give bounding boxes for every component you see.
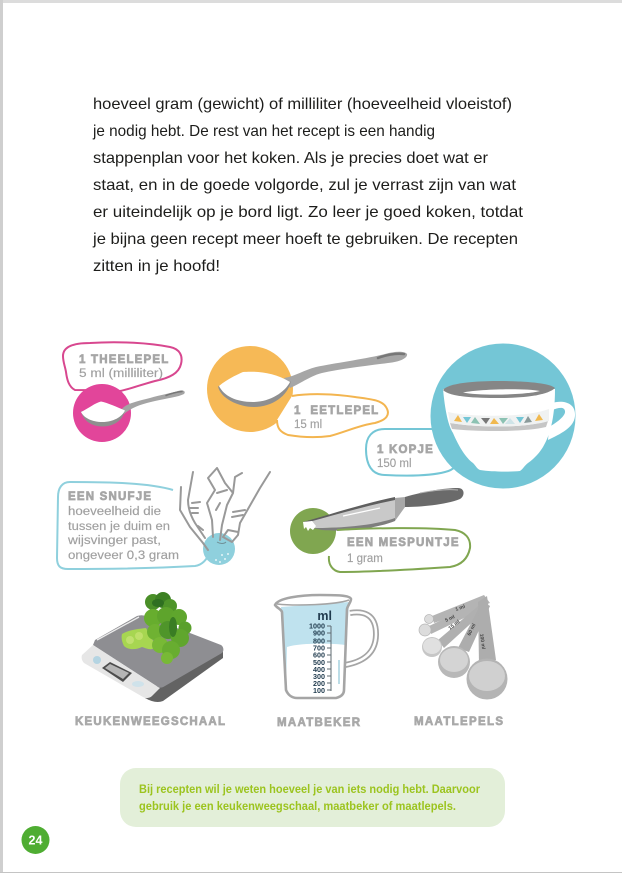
icon: blue circle with cup bbox=[430, 344, 576, 488]
panel: theelepel bbox=[63, 342, 185, 442]
icon: measuring spoons: 60 ml bbox=[466, 622, 478, 637]
body text paragraph: er uiteindelijk op je bord ligt. Zo leer je goed koken, totdat bbox=[93, 204, 524, 221]
cup handle bbox=[548, 402, 575, 440]
scale display bbox=[102, 662, 132, 682]
callout: 1 theelepel: 5 ml (milliliter) bbox=[79, 368, 163, 380]
callout: een snufje: ongeveer 0,3 gram bbox=[68, 550, 179, 562]
body text paragraph: je bijna geen recept meer hoeft te gebruiken. De recepten bbox=[92, 231, 518, 248]
callout: een snufje: wijsvinger past, bbox=[67, 535, 161, 547]
callout: een snufje bbox=[57, 482, 209, 569]
icon: measuring jug: 800 bbox=[313, 636, 325, 646]
callout: green note: Bij recepten wil je weten hoeveel je van iets nodig hebt. Daarvoor bbox=[139, 784, 480, 796]
icon: measuring jug: 700 bbox=[313, 644, 325, 652]
callout: green note: gebruik je een keukenweegschaal, maatbeker of maatlepels. bbox=[139, 801, 456, 813]
icon: measuring jug: 100 bbox=[313, 686, 325, 695]
panel: maatlepels bbox=[414, 595, 508, 728]
icon: measuring jug: 600 bbox=[313, 650, 325, 660]
icon: measuring spoons: 15 ml bbox=[448, 619, 462, 632]
callout: green note bbox=[120, 768, 505, 827]
page number badge: 24 bbox=[29, 834, 42, 848]
icon: measuring jug bbox=[275, 595, 376, 698]
body text paragraph: staat, en in de goede volgorde, zul je verrast zijn van wat bbox=[93, 177, 517, 194]
body text paragraph: je nodig hebt. De rest van het recept is een handig bbox=[92, 123, 435, 140]
icon: measuring spoons: 100 ml bbox=[478, 633, 486, 650]
panel: eetlepel bbox=[207, 346, 407, 437]
body text paragraph: zitten in je hoofd! bbox=[93, 258, 220, 275]
icon: measuring jug: 1000 bbox=[309, 622, 325, 630]
callout: 1 eetlepel bbox=[277, 394, 388, 437]
page number badge bbox=[22, 826, 50, 854]
callout: 1 kopje: 1 KOPJE bbox=[377, 444, 434, 456]
icon: measuring jug: 200 bbox=[313, 679, 325, 688]
icon: yellow circle with tablespoon bbox=[207, 346, 407, 432]
callout: een mespuntje: EEN MESPUNTJE bbox=[347, 537, 460, 549]
callout: 1 kopje: 150 ml bbox=[377, 458, 412, 470]
icon: measuring jug: 500 bbox=[313, 658, 325, 667]
cup pattern band bbox=[448, 409, 549, 431]
panel: mespuntje bbox=[290, 488, 470, 572]
callout: 1 eetlepel: 1 EETLEPEL bbox=[294, 405, 379, 417]
callout: 1 eetlepel: 15 ml bbox=[294, 419, 322, 431]
label: keukenweegschaal: KEUKENWEEGSCHAAL bbox=[75, 716, 225, 728]
cup rim bbox=[443, 381, 555, 398]
callout: een mespuntje: 1 gram bbox=[347, 553, 383, 565]
icon: measuring spoons: 5 ml bbox=[444, 614, 456, 624]
icon: measuring jug: 300 bbox=[313, 672, 325, 681]
body text paragraph bbox=[92, 96, 524, 275]
icon: measuring spoons bbox=[419, 595, 508, 700]
panel: maatbeker bbox=[275, 595, 376, 729]
icon: pink circle with teaspoon bbox=[73, 384, 185, 442]
icon: pinching fingers over blue circle bbox=[180, 468, 270, 565]
body text paragraph: hoeveel gram (gewicht) of milliliter (hoeveelheid vloeistof) bbox=[93, 96, 512, 113]
cup body bbox=[443, 389, 555, 472]
panel: snufje bbox=[57, 468, 270, 569]
icon: measuring spoons: 1 ml bbox=[455, 604, 467, 613]
callout: een snufje: EEN SNUFJE bbox=[68, 491, 152, 503]
callout: een snufje: tussen je duim en bbox=[68, 521, 170, 533]
icon: measuring jug: ml bbox=[317, 609, 332, 623]
callout: 1 theelepel bbox=[63, 342, 182, 391]
callout: een mespuntje bbox=[329, 528, 470, 572]
panel: keukenweegschaal bbox=[75, 592, 225, 728]
callout: een snufje: hoeveelheid die bbox=[68, 506, 161, 518]
body text paragraph: stappenplan voor het koken. Als je precies doet wat er bbox=[93, 150, 489, 167]
callout: 1 kopje bbox=[366, 429, 456, 476]
callout: 1 theelepel: 1 THEELEPEL bbox=[79, 354, 170, 366]
label: maatbeker: MAATBEKER bbox=[277, 717, 361, 729]
panel: kopje bbox=[366, 344, 576, 488]
icon: measuring jug: 400 bbox=[313, 665, 325, 674]
icon: kitchen scale with broccoli bbox=[82, 592, 223, 702]
label: maatlepels: MAATLEPELS bbox=[414, 716, 503, 728]
icon: green circle with knife bbox=[290, 488, 464, 554]
broccoli bbox=[122, 592, 192, 664]
icon: measuring jug: 900 bbox=[313, 628, 325, 638]
